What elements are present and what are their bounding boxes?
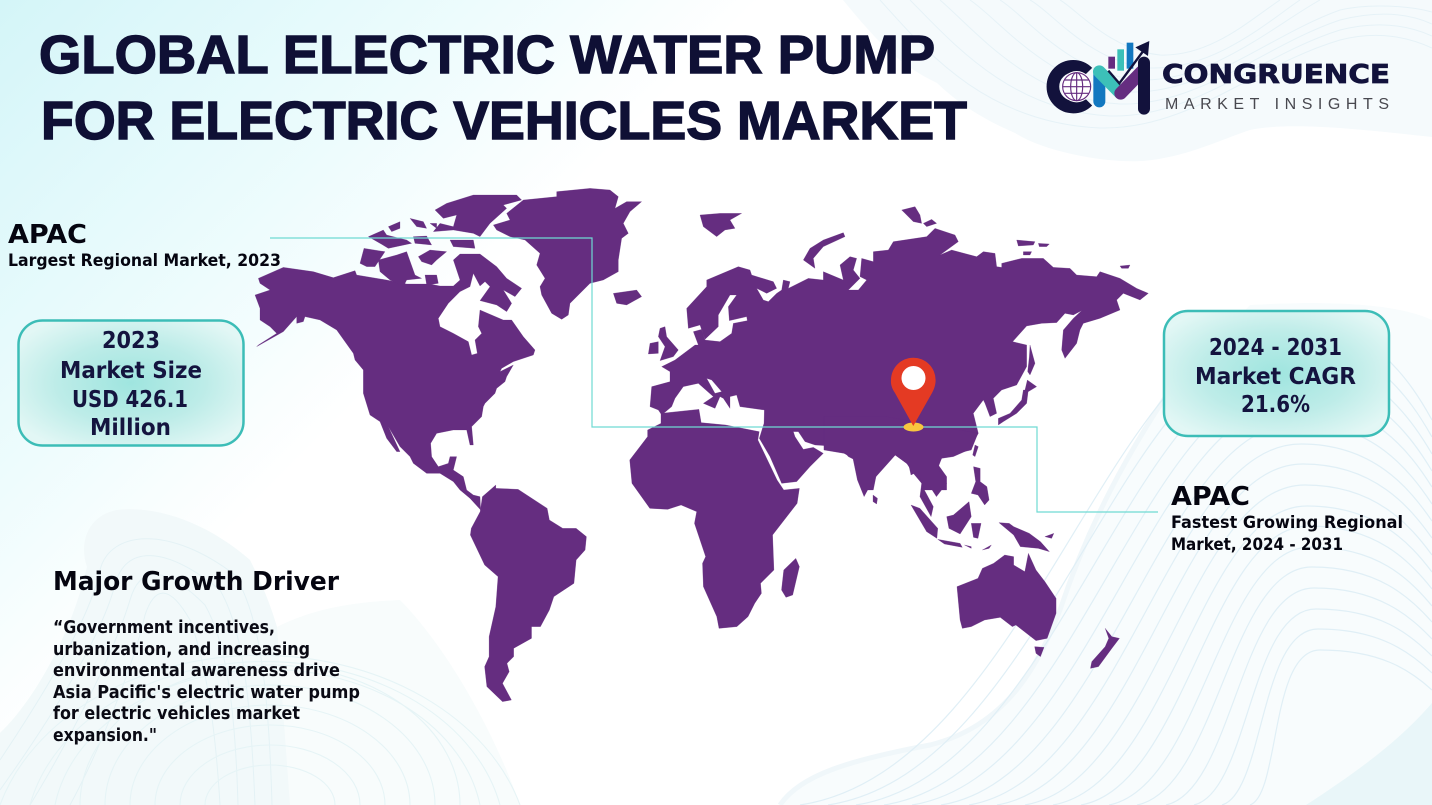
icon: location pin [891,358,936,432]
connector line: largest regional market to pin [270,238,905,427]
text block: growth driver quote: urbanization, and increasing [53,640,310,660]
text block: growth driver quote: environmental awareness drive [53,661,340,681]
text block: growth driver quote: Asia Pacific's electric water pump [53,683,360,703]
panel: 2023 market size: Million [90,415,171,441]
heading: major growth driver: Major Growth Driver [53,567,339,597]
callout: largest regional market: APAC [8,220,87,250]
background wave: top right [843,0,1432,161]
africa, south america, south asia and oceania [470,409,1119,702]
panel: 2023 market size: Market Size [60,358,202,384]
logo mark [1053,41,1149,109]
background wave: bottom left [0,509,520,805]
panel: 2023 market size: USD 426.1 [72,387,188,413]
title: FOR ELECTRIC VEHICLES MARKET [41,91,967,151]
background wave: bottom right [780,303,1432,805]
world map [255,188,1148,702]
callout: fastest growing regional market: APAC [1171,482,1250,512]
text block: growth driver quote: “Government incentives, [53,618,275,638]
eurasia [648,207,1148,490]
north america and arctic islands [255,188,642,510]
title: GLOBAL ELECTRIC WATER PUMP [39,25,935,85]
logo: congruence market insights: MARKET INSIGHTS [1165,96,1389,113]
callout: largest regional market [8,220,281,271]
text block: growth driver quote: expansion." [53,726,157,746]
panel: market cagr: Market CAGR [1195,364,1356,390]
panel: market cagr [1164,311,1389,436]
panel: market cagr: 2024 - 2031 [1209,335,1342,361]
callout: fastest growing regional market: Fastest Growing Regional [1171,513,1403,533]
text block: growth driver quote: for electric vehicles market [53,704,300,724]
panel: 2023 market size [18,320,244,446]
title [39,25,967,151]
panel: 2023 market size: 2023 [102,328,160,354]
panel: market cagr: 21.6% [1241,392,1310,418]
callout: fastest growing regional market [1171,482,1403,555]
logo: congruence market insights: CONGRUENCE [1162,60,1390,90]
callout: largest regional market: Largest Regional Market, 2023 [8,251,281,271]
callout: fastest growing regional market: Market, 2024 - 2031 [1171,535,1343,555]
connector line: pin to fastest growing region [920,427,1158,512]
logo: congruence market insights [1053,41,1390,113]
text block: growth driver quote [53,618,360,746]
